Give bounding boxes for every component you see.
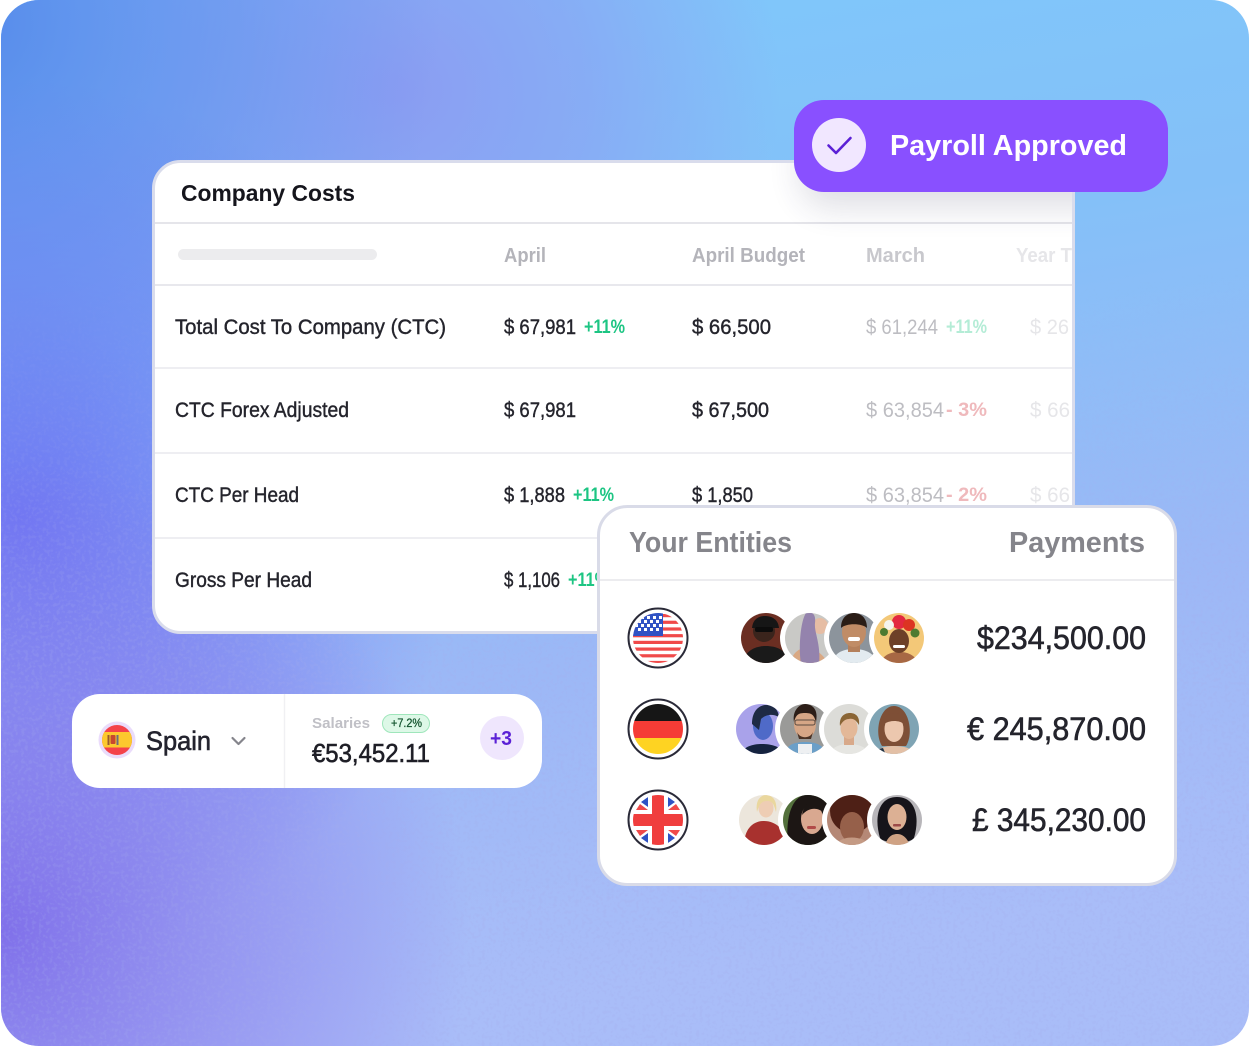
row: gross per head: +11% bbox=[568, 570, 609, 591]
icon: uk flag bbox=[628, 790, 688, 850]
row: ctc per head: $ 1,850 bbox=[692, 484, 753, 507]
panel: company costs table bbox=[154, 162, 1074, 632]
table header row: April bbox=[504, 245, 546, 267]
row: ctc forex adjusted: $ 67,981 bbox=[504, 399, 576, 422]
icon: spain flag bbox=[98, 722, 136, 758]
row: ctc per head bbox=[175, 484, 1070, 507]
row: total cost to company: $ 67,981 bbox=[504, 316, 576, 339]
row: ctc per head: $ 1,888 bbox=[504, 484, 565, 507]
heading: your entities: Your Entities bbox=[629, 527, 792, 559]
row: ctc forex adjusted: CTC Forex Adjusted bbox=[175, 399, 349, 422]
table header row: March bbox=[866, 245, 925, 267]
more badge: +3 bbox=[490, 728, 512, 750]
badge: payroll approved bbox=[794, 100, 1168, 192]
payment: germany: € 245,870.00 bbox=[967, 711, 1146, 747]
row: total cost to company: Total Cost To Company (CTC) bbox=[175, 316, 446, 339]
badge: payroll approved: Payroll Approved bbox=[890, 130, 1127, 162]
row: ctc forex adjusted bbox=[175, 399, 1070, 422]
icon: germany flag bbox=[628, 700, 688, 758]
table header row bbox=[178, 245, 1072, 267]
panel: spain salaries bbox=[72, 694, 542, 788]
heading: company costs: Company Costs bbox=[181, 180, 355, 206]
row: ctc per head: +11% bbox=[573, 485, 614, 506]
row: total cost to company: $ 26 bbox=[1030, 316, 1069, 339]
more badge bbox=[480, 716, 524, 760]
icon: chevron bbox=[232, 738, 244, 744]
row: ctc forex adjusted: $ 66 bbox=[1030, 399, 1070, 422]
table header row: April Budget bbox=[692, 245, 805, 267]
row: gross per head: $ 1,106 bbox=[504, 569, 560, 592]
row: ctc forex adjusted: - 3% bbox=[946, 400, 987, 421]
icon: us flag bbox=[628, 608, 688, 668]
panel: your entities bbox=[598, 506, 1176, 884]
change pill bbox=[382, 714, 430, 732]
row: total cost to company: $ 66,500 bbox=[692, 316, 771, 339]
change pill: +7.2% bbox=[391, 718, 422, 730]
row: ctc per head: CTC Per Head bbox=[175, 484, 299, 507]
icon: check mark bbox=[812, 118, 866, 172]
avatars: uk team bbox=[739, 795, 922, 845]
row: gross per head: Gross Per Head bbox=[175, 569, 312, 592]
payment: uk: £ 345,230.00 bbox=[972, 802, 1146, 838]
row: ctc per head: $ 63,854 bbox=[866, 484, 944, 507]
heading: payments: Payments bbox=[1009, 527, 1145, 559]
row: ctc forex adjusted: $ 67,500 bbox=[692, 399, 769, 422]
shadow of payroll badge bbox=[792, 163, 1072, 218]
avatars: germany team bbox=[736, 704, 919, 754]
payment: us: $234,500.00 bbox=[977, 620, 1146, 656]
country name: Spain bbox=[146, 726, 211, 756]
row: total cost to company: +11% bbox=[946, 317, 987, 338]
row: total cost to company: +11% bbox=[584, 317, 625, 338]
avatars: us team bbox=[741, 613, 924, 663]
row: total cost to company: $ 61,244 bbox=[866, 316, 938, 339]
row: germany bbox=[628, 699, 1146, 759]
row: ctc per head: $ 66 bbox=[1030, 484, 1070, 507]
row: gross per head bbox=[175, 569, 609, 592]
row: ctc forex adjusted: $ 63,854 bbox=[866, 399, 944, 422]
salaries label: Salaries bbox=[312, 715, 370, 732]
row: total cost to company bbox=[175, 316, 1069, 339]
row: ctc per head: - 2% bbox=[946, 485, 987, 506]
table header row: Year T bbox=[1016, 245, 1072, 267]
salaries amount: €53,452.11 bbox=[312, 738, 430, 768]
row: united states bbox=[628, 608, 1146, 668]
row: united kingdom bbox=[628, 789, 1146, 850]
